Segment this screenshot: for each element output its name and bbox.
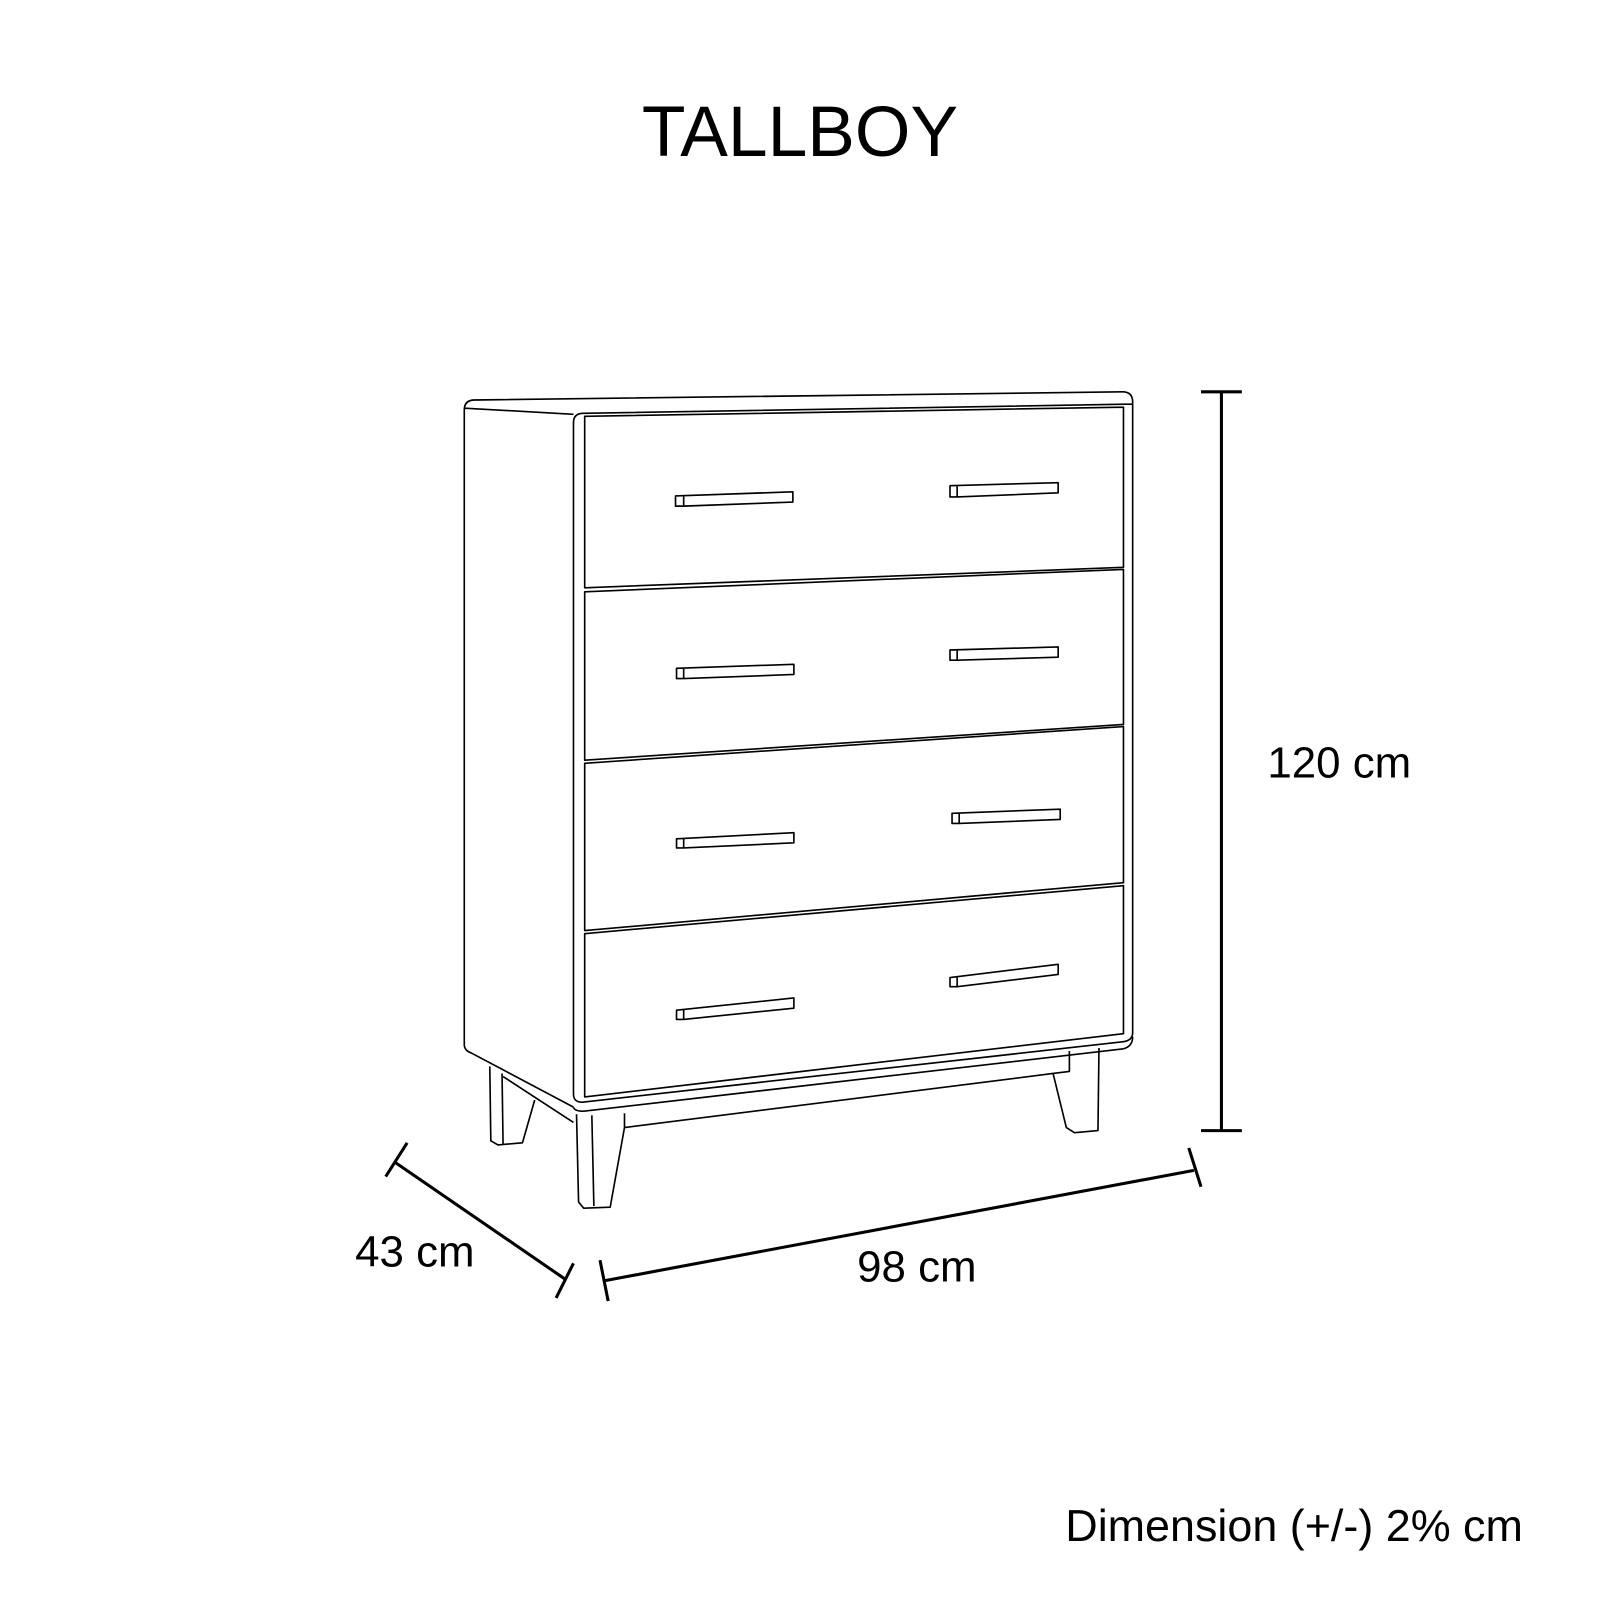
dimension: height — [1201, 392, 1242, 1131]
drawer fronts — [585, 407, 1123, 1097]
title: TALLBOY — [642, 92, 958, 172]
label: height: 120 cm — [1267, 739, 1411, 788]
cabinet body — [464, 392, 1133, 1111]
tallboy drawing — [464, 392, 1133, 1208]
footnote: Dimension (+/-) 2% cm — [1065, 1500, 1523, 1551]
label: width: 98 cm — [857, 1243, 977, 1292]
dimension: depth — [386, 1143, 573, 1298]
legs and apron — [490, 1048, 1099, 1208]
handles — [676, 483, 1060, 1019]
label: depth: 43 cm — [355, 1227, 475, 1276]
dimension: width — [600, 1148, 1201, 1301]
